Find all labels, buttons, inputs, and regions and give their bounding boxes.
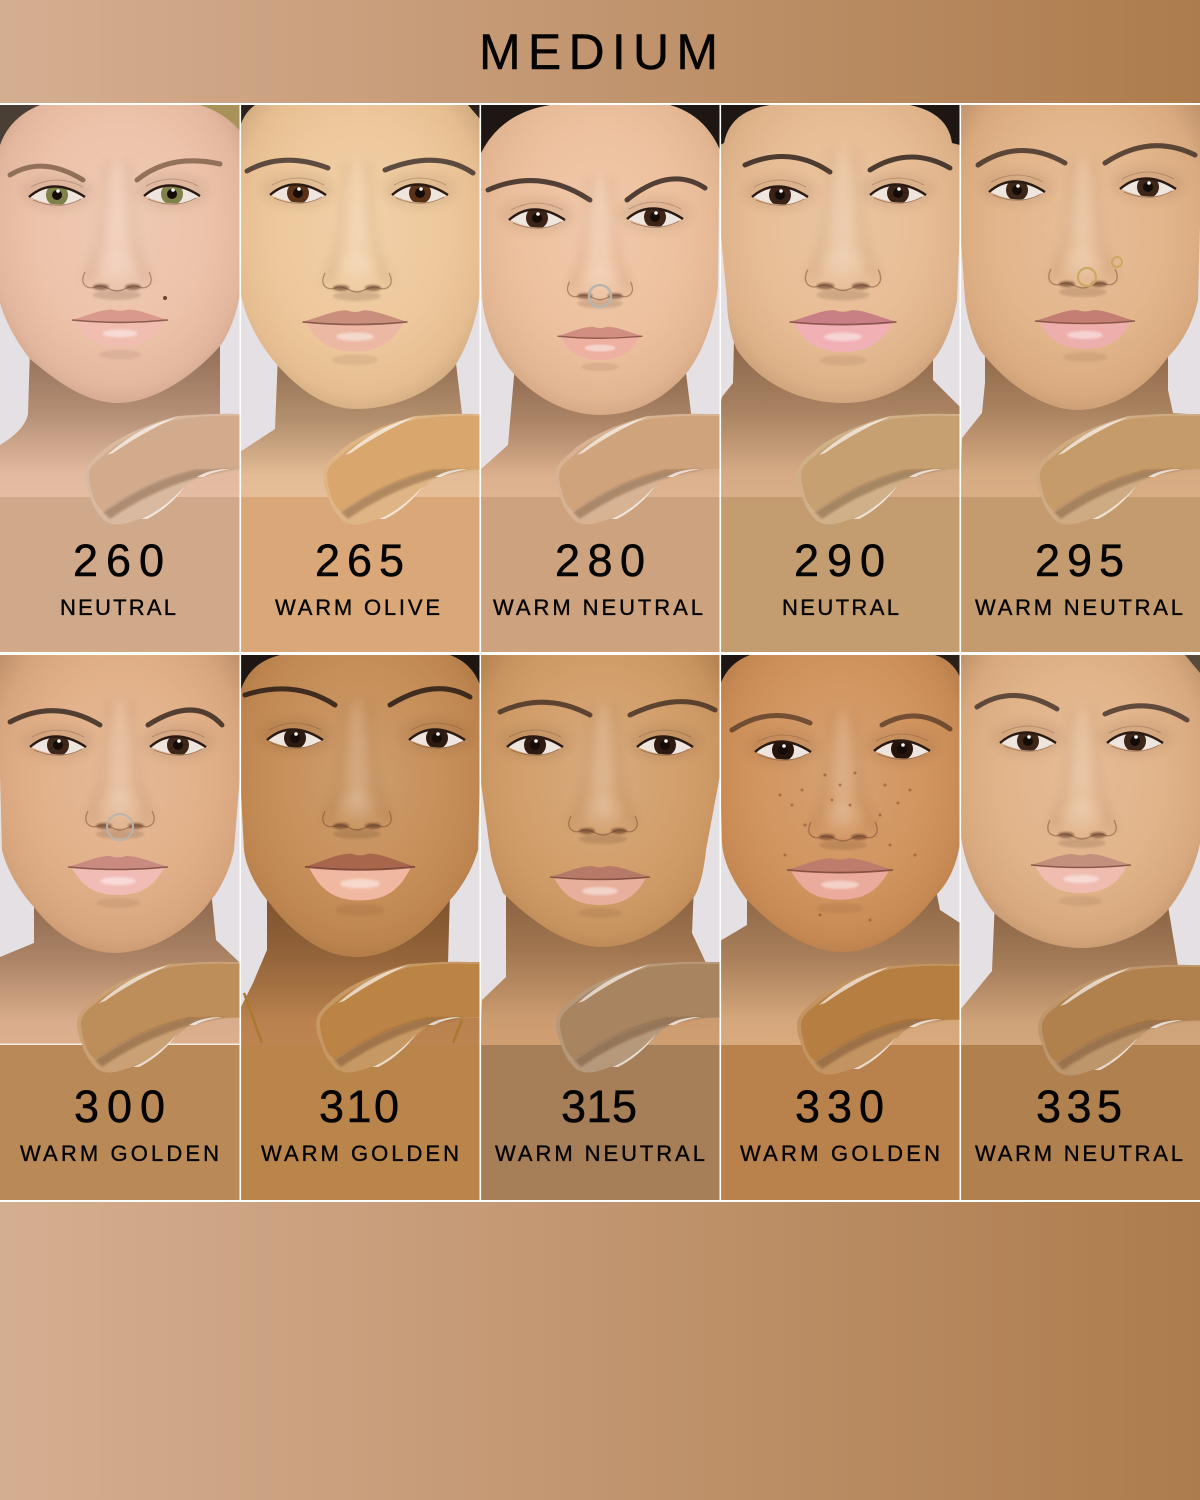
swatch 315	[556, 962, 720, 1072]
freckles 330	[778, 772, 916, 922]
label panel 300	[0, 655, 240, 1200]
number 295: 295	[1035, 535, 1124, 586]
lips 290	[790, 310, 896, 366]
nose 280	[566, 176, 634, 308]
card: shade 310	[240, 650, 486, 1200]
nose 290	[803, 148, 883, 300]
septum ring 300	[107, 814, 133, 840]
swatch 335	[1038, 964, 1200, 1076]
tone 265: WARM OLIVE	[275, 595, 440, 620]
nose 295	[1047, 158, 1119, 297]
necklace 310	[244, 993, 462, 1043]
eyes 300	[22, 724, 214, 760]
number 265: 265	[315, 535, 404, 586]
nose 335	[1046, 709, 1118, 848]
eyes 290	[744, 172, 934, 210]
tone 280: WARM NEUTRAL	[493, 595, 703, 620]
label panel 330	[720, 655, 960, 1200]
number 280: 280	[555, 535, 645, 586]
face photo 330	[721, 655, 960, 1045]
card: shade 315	[480, 650, 726, 1200]
label panel 280	[480, 105, 720, 652]
card: shade 290	[720, 100, 967, 652]
eyes 260	[21, 173, 208, 210]
tone 330: WARM GOLDEN	[740, 1141, 940, 1166]
face photo 300	[0, 655, 240, 1045]
card: shade 260	[0, 100, 255, 652]
number 290: 290	[794, 535, 885, 586]
number 335: 335	[1036, 1081, 1122, 1132]
card: shade 280	[480, 100, 725, 652]
swatch 280	[556, 414, 720, 524]
swatch 295	[1038, 414, 1200, 524]
face photo 260	[0, 105, 240, 497]
tone 295: WARM NEUTRAL	[975, 595, 1183, 620]
title: MEDIUM	[479, 24, 718, 80]
swatch 310	[316, 962, 480, 1072]
face photo 335	[961, 655, 1200, 1045]
lips 310	[305, 854, 415, 916]
eyes 280	[501, 196, 691, 233]
number 330: 330	[795, 1081, 884, 1132]
face photo 310	[241, 655, 480, 1044]
lips 330	[787, 858, 893, 913]
card: shade 265	[240, 100, 493, 652]
label panel 315	[480, 655, 720, 1200]
tone 300: WARM GOLDEN	[20, 1141, 219, 1166]
lips 265	[302, 310, 408, 365]
face photo 295	[961, 105, 1200, 497]
lips 335	[1031, 854, 1131, 906]
nose 300	[84, 700, 156, 839]
tone 260: NEUTRAL	[60, 595, 176, 620]
tone 315: WARM NEUTRAL	[495, 1141, 705, 1166]
lips 260	[72, 309, 168, 359]
lips 315	[550, 866, 650, 918]
nose 265	[321, 162, 393, 301]
number 310: 310	[319, 1081, 399, 1132]
eyes 315	[499, 724, 701, 760]
label panel 290	[720, 105, 960, 652]
nose 310	[321, 700, 393, 839]
eyes 335	[992, 720, 1171, 756]
card: shade 335	[960, 650, 1200, 1200]
card: shade 300	[0, 650, 247, 1200]
nose rings 295	[1078, 257, 1122, 286]
label panel 310	[240, 655, 480, 1200]
nose 315	[567, 705, 639, 844]
face photo 280	[481, 105, 720, 497]
number 260: 260	[73, 535, 164, 586]
tone 335: WARM NEUTRAL	[975, 1141, 1183, 1166]
label panel 260	[0, 105, 240, 652]
face photo 315	[481, 655, 720, 1045]
swatch 300	[77, 962, 240, 1072]
septum ring 280	[589, 285, 611, 307]
swatch 260	[85, 414, 240, 524]
number 300: 300	[74, 1081, 165, 1132]
label panel 295	[960, 105, 1200, 652]
swatch 330	[797, 964, 960, 1074]
eyes 295	[981, 166, 1184, 205]
nose 330	[807, 711, 879, 850]
face photo 290	[721, 105, 960, 497]
swatch 265	[323, 414, 480, 524]
tone 310: WARM GOLDEN	[261, 1141, 459, 1166]
label panel 335	[960, 655, 1200, 1200]
lips 300	[68, 856, 168, 908]
lips 280	[558, 327, 642, 371]
eyes 265	[262, 172, 456, 208]
label panel 265	[240, 105, 480, 652]
eyes 310	[259, 717, 473, 753]
white grid backing	[0, 103, 1200, 1202]
tone 290: NEUTRAL	[782, 595, 899, 620]
nose 260	[81, 161, 153, 300]
eyes 330	[747, 728, 938, 765]
face photo 265	[241, 105, 480, 497]
number 315: 315	[561, 1081, 637, 1132]
lips 295	[1035, 310, 1135, 362]
card: shade 295	[960, 100, 1200, 652]
swatch 290	[799, 414, 960, 524]
card: shade 330	[720, 650, 967, 1200]
